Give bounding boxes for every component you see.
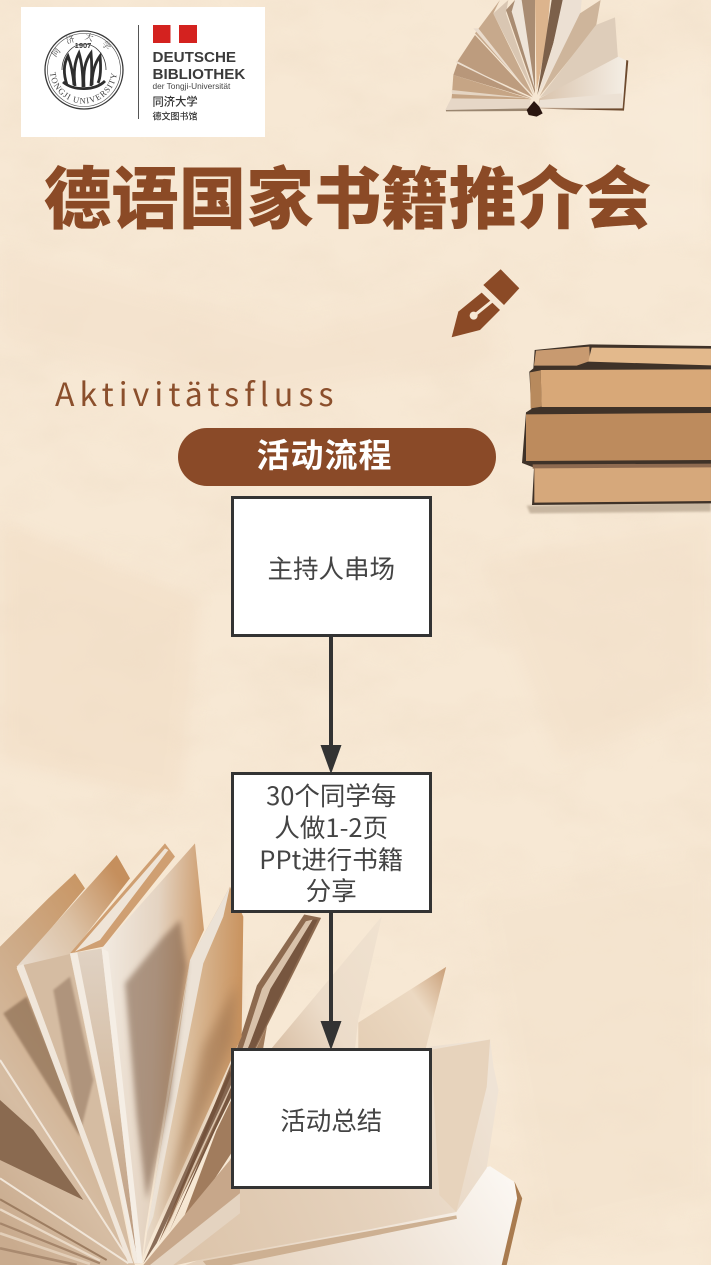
logo: Tongji University seal: 同济大学 bbox=[152, 94, 198, 110]
logo: Tongji University seal: 德文图书馆 bbox=[152, 110, 198, 122]
flow box: host: 主持人串场 bbox=[267, 549, 395, 586]
subtitle: Aktivitätsfluss: Aktivitätsfluss bbox=[55, 370, 339, 416]
logo: Tongji University seal: DEUTSCHE bbox=[152, 49, 236, 66]
logo: Tongji University seal: BIBLIOTHEK bbox=[152, 66, 245, 83]
flow box: book sharing bbox=[231, 772, 432, 913]
logo panel bbox=[21, 7, 265, 137]
flow box: summary: 活动总结 bbox=[280, 1101, 382, 1138]
logo: Tongji University seal: der Tongji-Universität bbox=[152, 81, 231, 91]
logo: Tongji University seal: TONGJI UNIVERSITY bbox=[50, 72, 116, 104]
flow box: book sharing: PPt进行书籍 bbox=[259, 840, 403, 876]
book: right pages bbox=[149, 914, 522, 1265]
flow box: book sharing: 人做1-2页 bbox=[274, 808, 388, 845]
title: 德语国家书籍推介会 bbox=[44, 146, 651, 243]
logo: Tongji University seal: 同济大学 bbox=[50, 33, 112, 58]
logo: Tongji University seal: 1907 bbox=[75, 41, 91, 50]
flow box: book sharing: 分享 bbox=[306, 871, 357, 908]
section heading pill bbox=[178, 428, 496, 486]
logo: Tongji University seal bbox=[44, 25, 246, 122]
flow box: book sharing: 30个同学每 bbox=[266, 776, 396, 813]
section heading pill: 活动流程 bbox=[256, 429, 392, 477]
book: left fanned pages bbox=[0, 843, 243, 1265]
flow box: summary bbox=[231, 1048, 432, 1189]
flow box: host bbox=[231, 496, 432, 637]
